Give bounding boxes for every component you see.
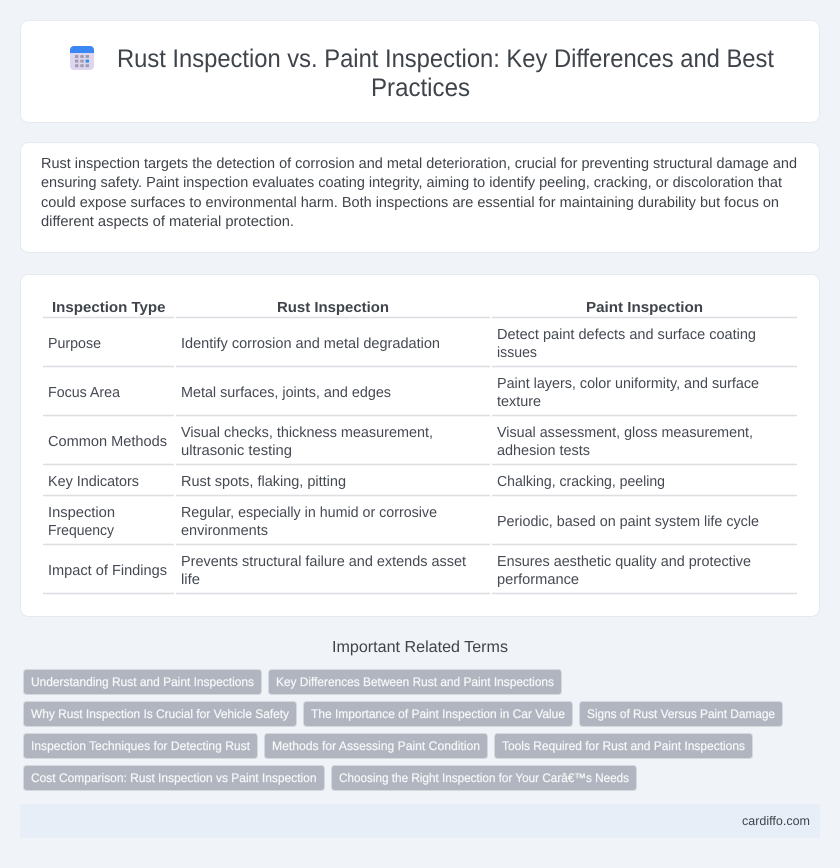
table header: Inspection Type (52, 300, 166, 316)
chip: Inspection Techniques for Detecting Rust (31, 739, 251, 753)
row: inspection frequency: Regular, especially in humid or corrosive (181, 505, 437, 521)
row: purpose: Purpose (48, 336, 101, 352)
text block: introduction: ensuring safety. Paint inspection evaluates coating integrity, aiming to identify peeling, cracking, or discoloration that (41, 175, 782, 191)
row: inspection frequency: Periodic, based on paint system life cycle (497, 514, 759, 530)
row: impact of findings: Impact of Findings (48, 563, 167, 579)
table header (52, 300, 703, 316)
row: focus area: texture (497, 394, 541, 410)
row: common methods: Common Methods (48, 434, 167, 450)
row: inspection frequency: Inspection (48, 505, 115, 521)
row: key indicators: Key Indicators (48, 474, 139, 490)
text block: introduction: different aspects of material protection. (41, 214, 294, 230)
row: common methods (48, 425, 753, 459)
row: impact of findings: Ensures aesthetic quality and protective (497, 554, 751, 570)
chip: Why Rust Inspection Is Crucial for Vehicle Safety (31, 707, 290, 721)
related term chips (24, 670, 782, 790)
row: impact of findings: performance (497, 572, 579, 588)
text block: introduction: Rust inspection targets the detection of corrosion and metal deterioration, crucial for preventing structural damage and (41, 156, 797, 172)
chip (24, 670, 262, 694)
chip: Choosing the Right Inspection for Your Carâ€™s Needs (339, 771, 629, 785)
row: impact of findings (48, 554, 751, 588)
chip: Tools Required for Rust and Paint Inspections (502, 739, 745, 753)
panel: comparison table (20, 274, 820, 616)
row: purpose: Detect paint defects and surface coating (497, 327, 756, 343)
row: impact of findings: life (181, 572, 200, 588)
chip: The Importance of Paint Inspection in Car Value (311, 707, 565, 721)
title: Practices (371, 74, 470, 102)
row: common methods: Visual checks, thickness measurement, (181, 425, 433, 441)
text block: introduction: could expose surfaces to environmental harm. Both inspections are essential for maintaining durability but focus on (41, 195, 779, 211)
chip (24, 766, 324, 790)
heading: related terms: Important Related Terms (332, 639, 508, 656)
chip: Cost Comparison: Rust Inspection vs Paint Inspection (31, 771, 317, 785)
chip: Signs of Rust Versus Paint Damage (587, 707, 775, 721)
chip: Methods for Assessing Paint Condition (272, 739, 480, 753)
chip (332, 766, 636, 790)
footer (20, 804, 820, 838)
row: focus area: Focus Area (48, 385, 121, 401)
chip (304, 702, 572, 726)
chip: Key Differences Between Rust and Paint Inspections (276, 675, 554, 689)
row: focus area: Paint layers, color uniformity, and surface (497, 376, 759, 392)
footer credit: cardiffo.com (742, 814, 810, 828)
icon: calendar (70, 46, 94, 70)
row: key indicators (48, 474, 665, 490)
row: purpose (48, 327, 756, 361)
row: inspection frequency: Frequency (48, 523, 115, 539)
table header: Rust Inspection (277, 300, 389, 316)
panel: introduction (20, 142, 820, 252)
chip: Understanding Rust and Paint Inspections (31, 675, 254, 689)
row: purpose: issues (497, 345, 537, 361)
row: common methods: Visual assessment, gloss measurement, (497, 425, 753, 441)
row: common methods: ultrasonic testing (181, 443, 292, 459)
chip (580, 702, 782, 726)
row: focus area: Metal surfaces, joints, and edges (181, 385, 391, 401)
row: inspection frequency: environments (181, 523, 268, 539)
chip (24, 702, 296, 726)
title (117, 45, 774, 102)
row: common methods: adhesion tests (497, 443, 590, 459)
panel: header (20, 20, 820, 122)
row: key indicators: Chalking, cracking, peeling (497, 474, 665, 490)
chip (494, 734, 752, 758)
row: key indicators: Rust spots, flaking, pitting (181, 474, 346, 490)
table header: Paint Inspection (586, 300, 703, 316)
row: focus area (48, 376, 759, 410)
row: purpose: Identify corrosion and metal degradation (181, 336, 440, 352)
chip (264, 734, 488, 758)
text block: introduction (41, 156, 797, 230)
title: Rust Inspection vs. Paint Inspection: Key Differences and Best (117, 45, 774, 73)
row: impact of findings: Prevents structural failure and extends asset (181, 554, 466, 570)
chip (24, 734, 258, 758)
row: inspection frequency (48, 505, 759, 539)
chip (268, 670, 562, 694)
